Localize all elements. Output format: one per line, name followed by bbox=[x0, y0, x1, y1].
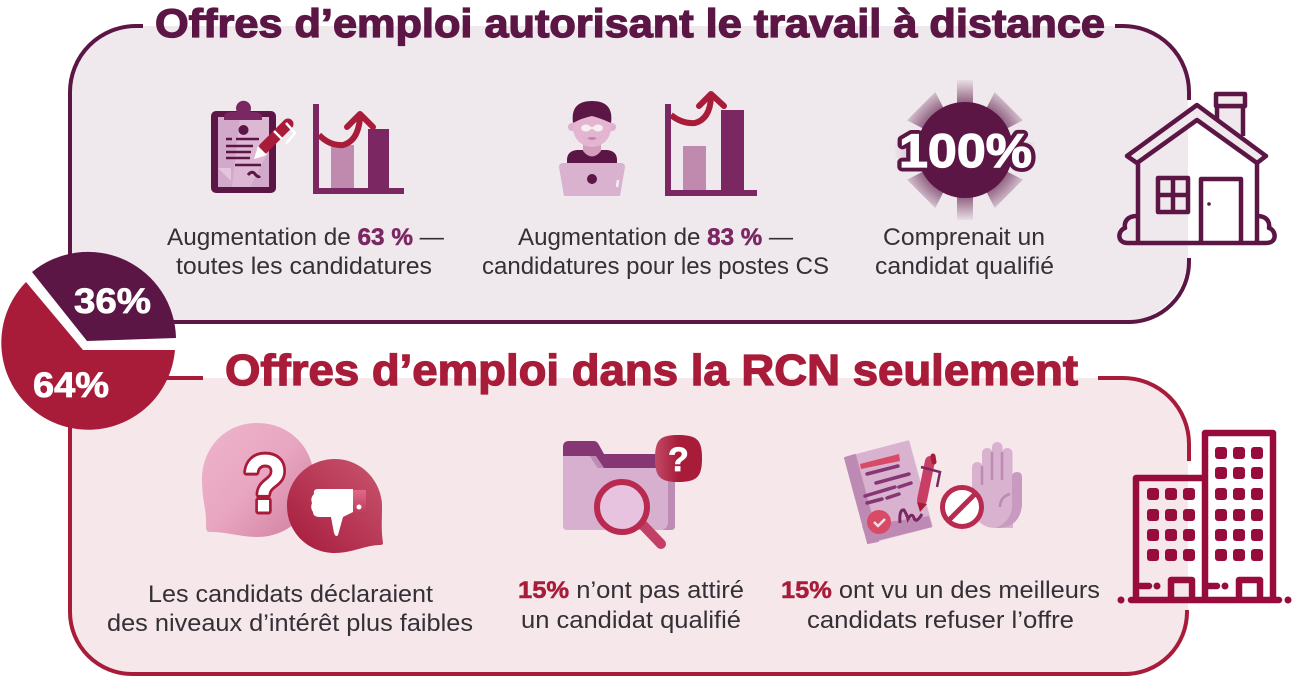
text: 83 percent: Augmentation de 83 % — bbox=[518, 224, 793, 251]
text: qualified candidate: un candidat qualifié bbox=[521, 607, 741, 634]
text: CS applications: candidatures pour les postes CS bbox=[482, 253, 829, 280]
text: qualified candidate: candidat qualifié bbox=[875, 253, 1054, 280]
icon: question and thumbs-down bubbles: ? bbox=[243, 439, 287, 528]
icon: question and thumbs-down bubbles: ? bbox=[243, 439, 287, 528]
text: refuse the offer: candidats refuser l’offre bbox=[807, 607, 1074, 634]
label: 64 percent: 64% bbox=[33, 366, 109, 405]
icon: folder with magnifier bbox=[563, 435, 702, 544]
text: candidates reported: Les candidats déclaraient bbox=[148, 581, 433, 608]
text: all applications: toutes les candidatures bbox=[176, 253, 432, 280]
text: 63 percent: Augmentation de 63 % — bbox=[167, 224, 444, 251]
icon: signed document bbox=[845, 442, 940, 543]
pie chart bbox=[1, 252, 176, 430]
text: lower interest: des niveaux d’intérêt plus faibles bbox=[107, 610, 473, 637]
chart icon: rising bars 63 bbox=[316, 104, 404, 191]
icon: 100% badge bbox=[895, 80, 1035, 220]
icon: question and thumbs-down bubbles bbox=[202, 423, 383, 553]
chart icon: rising bars 83 bbox=[668, 94, 757, 193]
title: remote: Offres d’emploi autorisant le travail à distance bbox=[155, 2, 1105, 46]
panel: NCR-only job postings bbox=[70, 378, 1189, 675]
icon: 100% badge: 100% bbox=[899, 124, 1032, 177]
icon: person with laptop bbox=[559, 101, 625, 196]
text: 15 percent saw top candidate: 15% ont vu un des meilleurs bbox=[781, 577, 1100, 604]
icon: house bbox=[1119, 94, 1275, 243]
text: included: Comprenait un bbox=[883, 224, 1045, 251]
slice: 64 percent bbox=[1, 282, 175, 430]
icon: clipboard bbox=[211, 101, 295, 193]
icon: 100% badge: 100% bbox=[899, 124, 1032, 177]
icon: stop hand bbox=[942, 442, 1022, 528]
icon: folder with magnifier: ? bbox=[668, 441, 689, 479]
slice: 36 percent bbox=[32, 252, 176, 341]
panel: remote job postings bbox=[70, 26, 1189, 322]
label: 36 percent: 36% bbox=[74, 282, 151, 321]
title: NCR: Offres d’emploi dans la RCN seulement bbox=[225, 346, 1078, 395]
icon: office buildings bbox=[1118, 433, 1292, 604]
text: 15 percent no qualified candidate: 15% n’ont pas attiré bbox=[518, 577, 744, 604]
